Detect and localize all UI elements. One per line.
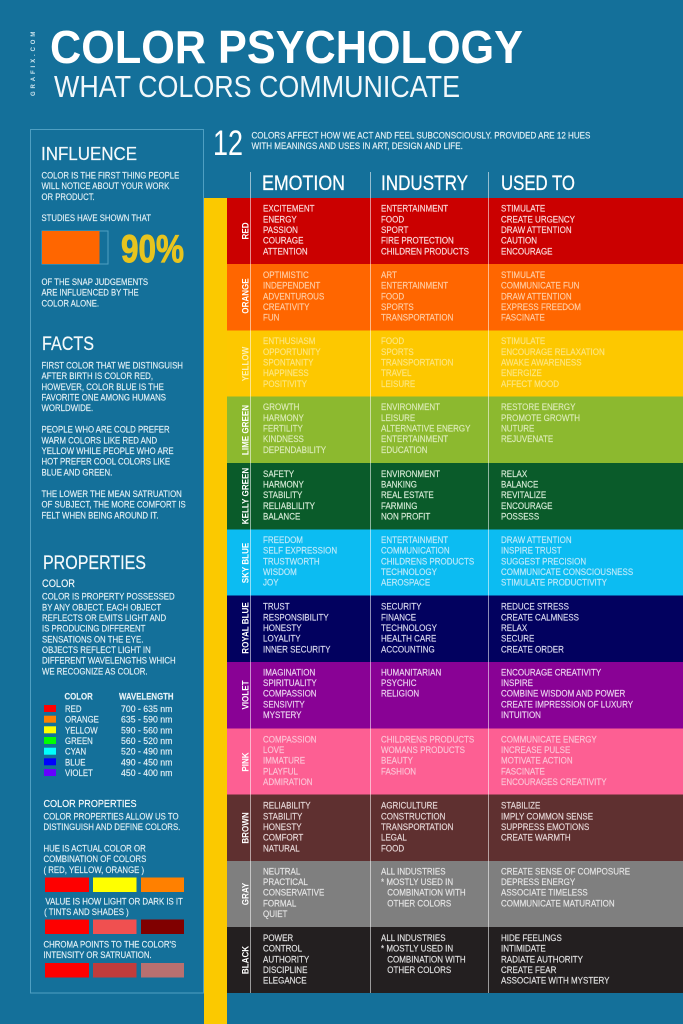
row: brown: COMFORT bbox=[263, 832, 303, 843]
text: fact one: AFTER BIRTH IS COLOR RED, bbox=[42, 371, 153, 381]
text: fact two: PEOPLE WHO ARE COLD PREFER bbox=[42, 424, 170, 435]
row: violet: HUMANITARIAN bbox=[381, 667, 441, 677]
row: kelly green: KELLY GREEN bbox=[240, 468, 251, 524]
row: yellow: STIMULATE bbox=[501, 336, 546, 346]
text: snap judgements: OF THE SNAP JUDGEMENTS bbox=[42, 276, 148, 287]
row: violet: PSYCHIC bbox=[381, 678, 417, 688]
row: sky blue: TECHNOLOGY bbox=[381, 567, 437, 577]
row: yellow: AFFECT MOOD bbox=[501, 378, 559, 389]
text: studies: STUDIES HAVE SHOWN THAT bbox=[42, 212, 151, 223]
row: kelly green: HARMONY bbox=[263, 479, 304, 490]
row: black: ASSOCIATE WITH MYSTERY bbox=[501, 975, 610, 986]
swatches: chroma bbox=[45, 963, 184, 978]
row: black bbox=[227, 927, 683, 993]
row: yellow: AWAKE AWARENESS bbox=[501, 357, 582, 368]
row: black: ALL INDUSTRIES bbox=[381, 933, 446, 943]
row: gray: OTHER COLORS bbox=[387, 898, 451, 908]
row: brown: NATURAL bbox=[263, 843, 300, 853]
column heading: emotion: EMOTION bbox=[262, 172, 345, 195]
swatches: hue bbox=[45, 878, 184, 892]
stat: 90 percent: 90% bbox=[121, 228, 184, 271]
text: value: VALUE IS HOW LIGHT OR DARK IS IT bbox=[45, 896, 183, 907]
row: brown: BROWN bbox=[240, 812, 251, 844]
row: orange: SPORTS bbox=[381, 302, 414, 312]
row: yellow: TRANSPORTATION bbox=[381, 357, 453, 368]
row: orange: OPTIMISTIC bbox=[263, 270, 309, 280]
row: yellow: ENTHUSIASM bbox=[263, 336, 315, 346]
row: royal blue: TECHNOLOGY bbox=[381, 623, 437, 633]
row: yellow: OPPORTUNITY bbox=[263, 346, 321, 357]
row: black: ELEGANCE bbox=[263, 975, 307, 986]
row: lime green: GROWTH bbox=[263, 402, 299, 412]
row: pink: PLAYFUL bbox=[263, 766, 298, 776]
row: pink: COMPASSION bbox=[263, 734, 317, 744]
row: red bbox=[227, 198, 683, 264]
row: pink: LOVE bbox=[263, 745, 285, 755]
row: orange: ORANGE bbox=[240, 278, 251, 314]
row: violet: COMPASSION bbox=[263, 688, 317, 699]
row: black: INTIMIDATE bbox=[501, 943, 546, 954]
row: royal blue: SECURE bbox=[501, 633, 535, 644]
column heading: used to: USED TO bbox=[501, 172, 575, 195]
row: brown: LEGAL bbox=[381, 832, 407, 843]
row: red: RED bbox=[240, 222, 251, 240]
color names: CYAN bbox=[65, 746, 86, 757]
text: chroma: CHROMA POINTS TO THE COLOR'S bbox=[44, 939, 177, 950]
row: yellow: LEISURE bbox=[381, 378, 416, 389]
row: lime green bbox=[227, 396, 683, 463]
row: kelly green: SAFETY bbox=[263, 468, 294, 479]
row: sky blue: SELF EXPRESSION bbox=[263, 545, 337, 556]
text: hue: COMBINATION OF COLORS bbox=[44, 854, 147, 864]
row: violet: INSPIRE bbox=[501, 678, 533, 688]
row: orange: FOOD bbox=[381, 291, 404, 301]
row: sky blue: CHILDRENS PRODUCTS bbox=[381, 556, 475, 566]
row: black: CONTROL bbox=[263, 943, 302, 954]
row: gray: NEUTRAL bbox=[263, 866, 301, 876]
brand: grafix.com vertical label: GRAFIX.COM bbox=[31, 30, 37, 96]
row: pink: FASCINATE bbox=[501, 766, 545, 776]
row: kelly green: REAL ESTATE bbox=[381, 490, 434, 500]
text: hue: ( RED, YELLOW, ORANGE ) bbox=[44, 864, 144, 875]
row: red: ATTENTION bbox=[263, 246, 308, 256]
row: orange: INDEPENDENT bbox=[263, 280, 320, 291]
text: influence intro: OR PRODUCT. bbox=[42, 191, 95, 202]
row: violet: CREATE IMPRESSION OF LUXURY bbox=[501, 699, 633, 709]
text: fact one: FIRST COLOR THAT WE DISTINGUISH bbox=[42, 360, 183, 371]
row: royal blue: FINANCE bbox=[381, 612, 416, 622]
row: brown: FOOD bbox=[381, 843, 404, 853]
row: lime green: PROMOTE GROWTH bbox=[501, 412, 580, 423]
row: red: ENTERTAINMENT bbox=[381, 203, 448, 214]
row: gray: FORMAL bbox=[263, 898, 297, 908]
row: yellow: SPORTS bbox=[381, 346, 414, 357]
row: sky blue: SUGGEST PRECISION bbox=[501, 556, 586, 566]
row: royal blue: CREATE CALMNESS bbox=[501, 612, 579, 622]
row: pink: WOMANS PRODUCTS bbox=[381, 745, 465, 755]
color names: VIOLET bbox=[65, 767, 93, 778]
row: yellow: ENERGIZE bbox=[501, 368, 542, 378]
row: red: FOOD bbox=[381, 214, 404, 224]
text: influence intro: WILL NOTICE ABOUT YOUR WORK bbox=[42, 181, 170, 191]
row: royal blue: HEALTH CARE bbox=[381, 633, 437, 644]
row: orange: COMMUNICATE FUN bbox=[501, 280, 579, 291]
wavelength values: 635 - 590 nm bbox=[121, 715, 172, 725]
row: red: EXCITEMENT bbox=[263, 203, 315, 214]
text: fact one: WORLDWIDE. bbox=[42, 403, 93, 413]
subtitle: WHAT COLORS COMMUNICATE bbox=[54, 69, 460, 104]
panel: sidebar bbox=[30, 130, 204, 993]
row: kelly green: RELIABLILITY bbox=[263, 500, 315, 511]
table header: wavelength: WAVELENGTH bbox=[119, 691, 174, 702]
row: lime green: RESTORE ENERGY bbox=[501, 402, 576, 412]
legend swatches bbox=[44, 705, 56, 776]
row: pink bbox=[227, 728, 683, 794]
row: lime green: ENVIRONMENT bbox=[381, 402, 440, 412]
row: lime green: HARMONY bbox=[263, 412, 304, 423]
row: black: HIDE FEELINGS bbox=[501, 933, 562, 943]
row: kelly green: ENVIRONMENT bbox=[381, 468, 440, 479]
text: color definition: WE RECOGNIZE AS COLOR. bbox=[42, 666, 148, 677]
text: color definition: DIFFERENT WAVELENGTHS WHICH bbox=[42, 655, 176, 666]
row: orange: ADVENTUROUS bbox=[263, 291, 325, 301]
row: red: STIMULATE bbox=[501, 203, 546, 214]
row: royal blue: INNER SECURITY bbox=[263, 644, 331, 654]
row: yellow: SPONTANITY bbox=[263, 357, 314, 368]
text: chroma: INTENSITY OR SATRUATION. bbox=[44, 950, 152, 960]
text: fact two: BLUE AND GREEN. bbox=[42, 467, 112, 478]
row: black: COMBINATION WITH bbox=[387, 954, 466, 964]
wavelength values: 700 - 635 nm bbox=[121, 704, 172, 714]
number: 12: 12 bbox=[213, 124, 243, 163]
row: kelly green bbox=[227, 463, 683, 530]
table: wavelength bbox=[44, 691, 174, 778]
table header: color: COLOR bbox=[64, 691, 93, 702]
row: violet bbox=[227, 662, 683, 728]
row: lime green: EDUCATION bbox=[381, 444, 427, 455]
row: royal blue: LOYALITY bbox=[263, 633, 301, 644]
row: violet: RELIGION bbox=[381, 688, 419, 699]
row: orange: DRAW ATTENTION bbox=[501, 291, 572, 301]
heading: influence: INFLUENCE bbox=[41, 144, 137, 164]
row: pink: COMMUNICATE ENERGY bbox=[501, 734, 597, 744]
row: violet: MYSTERY bbox=[263, 710, 302, 720]
row: gray: CONSERVATIVE bbox=[263, 887, 325, 898]
row: orange: CREATIVITY bbox=[263, 302, 310, 312]
row: pink: BEAUTY bbox=[381, 755, 413, 766]
row: pink: ADMIRATION bbox=[263, 777, 313, 787]
row: royal blue: HONESTY bbox=[263, 623, 302, 633]
heading: facts: FACTS bbox=[42, 334, 94, 355]
row: yellow: TRAVEL bbox=[381, 368, 412, 378]
row: red: ENCOURAGE bbox=[501, 246, 553, 256]
wavelength values: 560 - 520 nm bbox=[121, 736, 172, 746]
row: red: SPORT bbox=[381, 225, 408, 235]
text: color properties intro: DISTINGUISH AND DEFINE COLORS. bbox=[44, 822, 180, 832]
row: gray: PRACTICAL bbox=[263, 877, 308, 887]
text: value: ( TINTS AND SHADES ) bbox=[44, 907, 129, 917]
text: fact two: WARM COLORS LIKE RED AND bbox=[42, 435, 157, 446]
color names: ORANGE bbox=[65, 714, 99, 725]
yellow side band bbox=[204, 198, 227, 1024]
row: sky blue: COMMUNICATION bbox=[381, 545, 450, 556]
row: sky blue: TRUSTWORTH bbox=[263, 556, 320, 566]
row: gray: ASSOCIATE TIMELESS bbox=[501, 887, 588, 898]
row: gray: QUIET bbox=[263, 909, 287, 919]
row: kelly green: POSSESS bbox=[501, 511, 540, 522]
row: pink: CHILDRENS PRODUCTS bbox=[381, 734, 475, 744]
row: brown: SUPPRESS EMOTIONS bbox=[501, 822, 590, 832]
text: intro: COLORS AFFECT HOW WE ACT AND FEEL SUBCONSCIOUSLY. PROVIDED ARE 12 HUES bbox=[252, 130, 591, 141]
swatches: value bbox=[45, 920, 184, 934]
row: red: FIRE PROTECTION bbox=[381, 235, 454, 246]
wavelength values: 490 - 450 nm bbox=[121, 757, 172, 767]
wavelength values: 590 - 560 nm bbox=[121, 725, 172, 735]
row: red: PASSION bbox=[263, 225, 298, 235]
text: intro: WITH MEANINGS AND USES IN ART, DESIGN AND LIFE. bbox=[252, 141, 463, 151]
row: sky blue: FREEDOM bbox=[263, 535, 303, 545]
row: kelly green: NON PROFIT bbox=[381, 511, 430, 522]
row: gray: CREATE SENSE OF COMPOSURE bbox=[501, 866, 630, 876]
row: sky blue bbox=[227, 530, 683, 596]
row: orange: TRANSPORTATION bbox=[381, 312, 453, 323]
row: brown: CONSTRUCTION bbox=[381, 811, 445, 821]
text: color definition: COLOR IS PROPERTY POSSESSED bbox=[42, 591, 175, 602]
color names: GREEN bbox=[65, 735, 93, 746]
text: color definition: REFLECTS OR EMITS LIGHT AND bbox=[42, 613, 166, 623]
row: kelly green: STABILITY bbox=[263, 490, 303, 500]
row: gray: COMBINATION WITH bbox=[387, 887, 466, 898]
text: color properties intro: COLOR PROPERTIES ALLOW US TO bbox=[44, 811, 179, 822]
row: gray: DEPRESS ENERGY bbox=[501, 877, 575, 887]
row: kelly green: BALANCE bbox=[263, 511, 301, 522]
text: fact three: OF SUBJECT, THE MORE COMFORT IS bbox=[42, 499, 186, 510]
row: lime green: ALTERNATIVE ENERGY bbox=[381, 423, 471, 434]
row: brown bbox=[227, 794, 683, 861]
row: pink: ENCOURAGES CREATIVITY bbox=[501, 777, 607, 787]
row: red: ENERGY bbox=[263, 214, 297, 224]
row: pink: MOTIVATE ACTION bbox=[501, 755, 573, 766]
row: orange: ART bbox=[381, 270, 397, 280]
row: brown: RELIABILITY bbox=[263, 800, 311, 811]
row: yellow: YELLOW bbox=[240, 346, 251, 381]
row: black: CREATE FEAR bbox=[501, 965, 556, 975]
text: color definition: BY ANY OBJECT. EACH OBJECT bbox=[42, 602, 161, 613]
text: color definition: IS PRODUCING DIFFERENT bbox=[42, 623, 145, 634]
row: lime green: DEPENDABILITY bbox=[263, 444, 326, 455]
row: royal blue: SECURITY bbox=[381, 601, 422, 612]
subheading: color properties: COLOR PROPERTIES bbox=[44, 798, 136, 810]
text: fact one: HOWEVER, COLOR BLUE IS THE bbox=[42, 381, 164, 392]
text: fact two: YELLOW WHILE PEOPLE WHO ARE bbox=[42, 446, 174, 456]
text: fact three: THE LOWER THE MEAN SATRUATION bbox=[42, 488, 182, 499]
row: pink: INCREASE PULSE bbox=[501, 745, 571, 755]
text: fact one: FAVORITE ONE AMONG HUMANS bbox=[42, 392, 166, 403]
row: black: RADIATE AUTHORITY bbox=[501, 954, 583, 964]
row: brown: CREATE WARMTH bbox=[501, 832, 571, 843]
row: yellow: ENCOURAGE RELAXATION bbox=[501, 346, 605, 357]
row: black: * MOSTLY USED IN bbox=[381, 943, 453, 954]
row: sky blue: JOY bbox=[263, 577, 279, 588]
row: royal blue: CREATE ORDER bbox=[501, 644, 564, 654]
color names: YELLOW bbox=[65, 725, 98, 735]
subheading: color: COLOR bbox=[42, 578, 75, 590]
row: violet: COMBINE WISDOM AND POWER bbox=[501, 688, 625, 699]
row: lime green: ENTERTAINMENT bbox=[381, 434, 448, 444]
row: royal blue: ROYAL BLUE bbox=[240, 602, 251, 654]
row: black: BLACK bbox=[240, 945, 251, 974]
heading: properties: PROPERTIES bbox=[43, 553, 146, 574]
row: royal blue: RELAX bbox=[501, 623, 528, 633]
row: kelly green: BALANCE bbox=[501, 479, 539, 490]
row: lime green: FERTILITY bbox=[263, 423, 303, 434]
row: kelly green: BANKING bbox=[381, 479, 417, 490]
row: black: POWER bbox=[263, 933, 293, 943]
row: pink: IMMATURE bbox=[263, 755, 305, 766]
row: pink: PINK bbox=[240, 752, 251, 772]
row: black: AUTHORITY bbox=[263, 954, 309, 964]
title: COLOR PSYCHOLOGY bbox=[50, 21, 523, 73]
row: sky blue: AEROSPACE bbox=[381, 577, 430, 588]
row: orange: FASCINATE bbox=[501, 312, 545, 323]
row: lime green: LIME GREEN bbox=[240, 405, 251, 455]
row: red: CREATE URGENCY bbox=[501, 214, 575, 224]
row: orange: STIMULATE bbox=[501, 270, 546, 280]
row: brown: STABILITY bbox=[263, 811, 303, 821]
row: lime green: KINDNESS bbox=[263, 434, 304, 444]
text: color definition: SENSATIONS ON THE EYE. bbox=[42, 634, 143, 645]
row: sky blue: WISDOM bbox=[263, 567, 297, 577]
row: violet: SENSIVITY bbox=[263, 699, 305, 709]
row: lime green: NUTURE bbox=[501, 423, 535, 434]
wavelength values: 520 - 490 nm bbox=[121, 747, 172, 757]
row: yellow: POSITIVITY bbox=[263, 378, 307, 389]
row: brown: STABILIZE bbox=[501, 800, 541, 811]
row: violet: INTUITION bbox=[501, 710, 541, 720]
row: black: DISCIPLINE bbox=[263, 965, 308, 975]
text: hue: HUE IS ACTUAL COLOR OR bbox=[44, 843, 146, 854]
text: influence intro: COLOR IS THE FIRST THING PEOPLE bbox=[42, 170, 180, 181]
row: red: CAUTION bbox=[501, 235, 537, 246]
row: violet: IMAGINATION bbox=[263, 667, 315, 677]
row: orange: EXPRESS FREEDOM bbox=[501, 302, 581, 312]
row: orange bbox=[227, 264, 683, 330]
row: orange: FUN bbox=[263, 312, 279, 323]
row: sky blue: INSPIRE TRUST bbox=[501, 545, 562, 556]
row: lime green: LEISURE bbox=[381, 412, 416, 423]
row: yellow bbox=[227, 330, 683, 396]
row: lime green: REJUVENATE bbox=[501, 434, 554, 444]
row: red: COURAGE bbox=[263, 235, 304, 246]
row: sky blue: COMMUNICATE CONSCIOUSNESS bbox=[501, 567, 633, 577]
row: gray: * MOSTLY USED IN bbox=[381, 877, 453, 887]
row: red: CHILDREN PRODUCTS bbox=[381, 246, 469, 256]
row: yellow: HAPPINESS bbox=[263, 368, 309, 378]
color names: BLUE bbox=[65, 757, 86, 767]
row: red: DRAW ATTENTION bbox=[501, 225, 572, 235]
text: snap judgements: COLOR ALONE. bbox=[42, 298, 99, 308]
row: brown: AGRICULTURE bbox=[381, 800, 438, 811]
text: fact two: HOT PREFER COOL COLORS LIKE bbox=[42, 456, 170, 467]
row: royal blue bbox=[227, 596, 683, 662]
column heading: industry: INDUSTRY bbox=[381, 172, 468, 195]
row: brown: HONESTY bbox=[263, 822, 302, 832]
row: gray: COMMUNICATE MATURATION bbox=[501, 898, 615, 908]
color names: RED bbox=[65, 703, 82, 714]
wavelength values: 450 - 400 nm bbox=[121, 768, 172, 778]
row: royal blue: REDUCE STRESS bbox=[501, 601, 569, 612]
row: violet: ENCOURAGE CREATIVITY bbox=[501, 667, 602, 677]
row: sky blue: ENTERTAINMENT bbox=[381, 535, 448, 545]
row: kelly green: FARMING bbox=[381, 500, 417, 511]
chart: 90 percent bar bbox=[42, 231, 108, 264]
row: kelly green: REVITALIZE bbox=[501, 490, 546, 500]
row: orange: ENTERTAINMENT bbox=[381, 280, 448, 291]
row: sky blue: SKY BLUE bbox=[240, 543, 251, 583]
row: violet: VIOLET bbox=[240, 680, 251, 710]
row: royal blue: TRUST bbox=[263, 601, 290, 612]
row: gray: GRAY bbox=[240, 883, 251, 905]
row: yellow: FOOD bbox=[381, 336, 404, 346]
row: gray bbox=[227, 861, 683, 927]
text: fact three: FELT WHEN BEING AROUND IT. bbox=[42, 510, 158, 520]
text: color definition: OBJECTS REFLECT LIGHT IN bbox=[42, 645, 151, 655]
row: royal blue: RESPONSIBILITY bbox=[263, 612, 329, 622]
row: kelly green: RELAX bbox=[501, 468, 528, 479]
row: kelly green: ENCOURAGE bbox=[501, 500, 553, 511]
row: sky blue: STIMULATE PRODUCTIVITY bbox=[501, 577, 607, 588]
row: sky blue: DRAW ATTENTION bbox=[501, 535, 572, 545]
row: royal blue: ACCOUNTING bbox=[381, 644, 435, 654]
row: brown: TRANSPORTATION bbox=[381, 822, 453, 832]
row: pink: FASHION bbox=[381, 766, 416, 776]
row: brown: IMPLY COMMON SENSE bbox=[501, 811, 593, 821]
row: gray: ALL INDUSTRIES bbox=[381, 866, 446, 876]
row: black: OTHER COLORS bbox=[387, 965, 451, 975]
row: violet: SPIRITUALITY bbox=[263, 678, 317, 688]
text: snap judgements: ARE INFLUENCED BY THE bbox=[42, 287, 139, 298]
